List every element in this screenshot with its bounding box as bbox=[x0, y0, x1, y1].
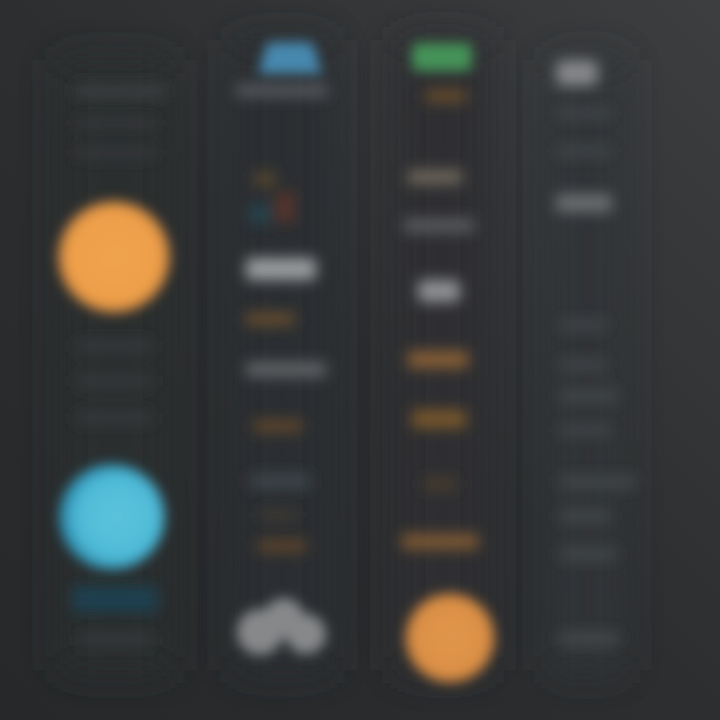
column 4 rows bbox=[558, 108, 636, 646]
tan label bbox=[408, 170, 462, 184]
grey label bbox=[556, 194, 612, 212]
green header tab bbox=[412, 43, 472, 71]
orange label bbox=[254, 420, 302, 432]
panel: column 1 bbox=[58, 60, 170, 670]
column 1 heading bbox=[76, 84, 164, 98]
column 2 heading bar bbox=[236, 84, 328, 97]
icon: orange circle bottom bbox=[405, 593, 495, 683]
orange sub heading bbox=[426, 90, 466, 102]
icon: orange circle bbox=[58, 201, 170, 313]
orange label bbox=[258, 540, 306, 552]
orange label bbox=[402, 534, 478, 549]
panel: column 2 bbox=[235, 40, 330, 670]
blue header tab bbox=[258, 42, 322, 74]
brown small label bbox=[424, 478, 456, 490]
panel: column 4 bbox=[552, 60, 636, 670]
grey label bbox=[246, 362, 326, 377]
icon: blue circle bbox=[59, 464, 165, 570]
light badge bbox=[556, 60, 598, 86]
orange label bbox=[408, 351, 468, 368]
blue label below circle bbox=[72, 586, 158, 612]
icon: cloud bbox=[237, 598, 326, 655]
column 1 text rows bbox=[76, 118, 156, 424]
grey label bbox=[404, 219, 474, 232]
brown small label bbox=[260, 510, 296, 520]
light label bbox=[418, 280, 460, 302]
orange label bbox=[246, 313, 294, 325]
orange label bbox=[412, 410, 466, 428]
panel: column 3 bbox=[398, 40, 495, 683]
faint label below blue label bbox=[80, 634, 152, 646]
column 2 small icons bbox=[250, 172, 294, 223]
grey-blue label bbox=[250, 474, 310, 488]
light label bbox=[246, 258, 316, 280]
